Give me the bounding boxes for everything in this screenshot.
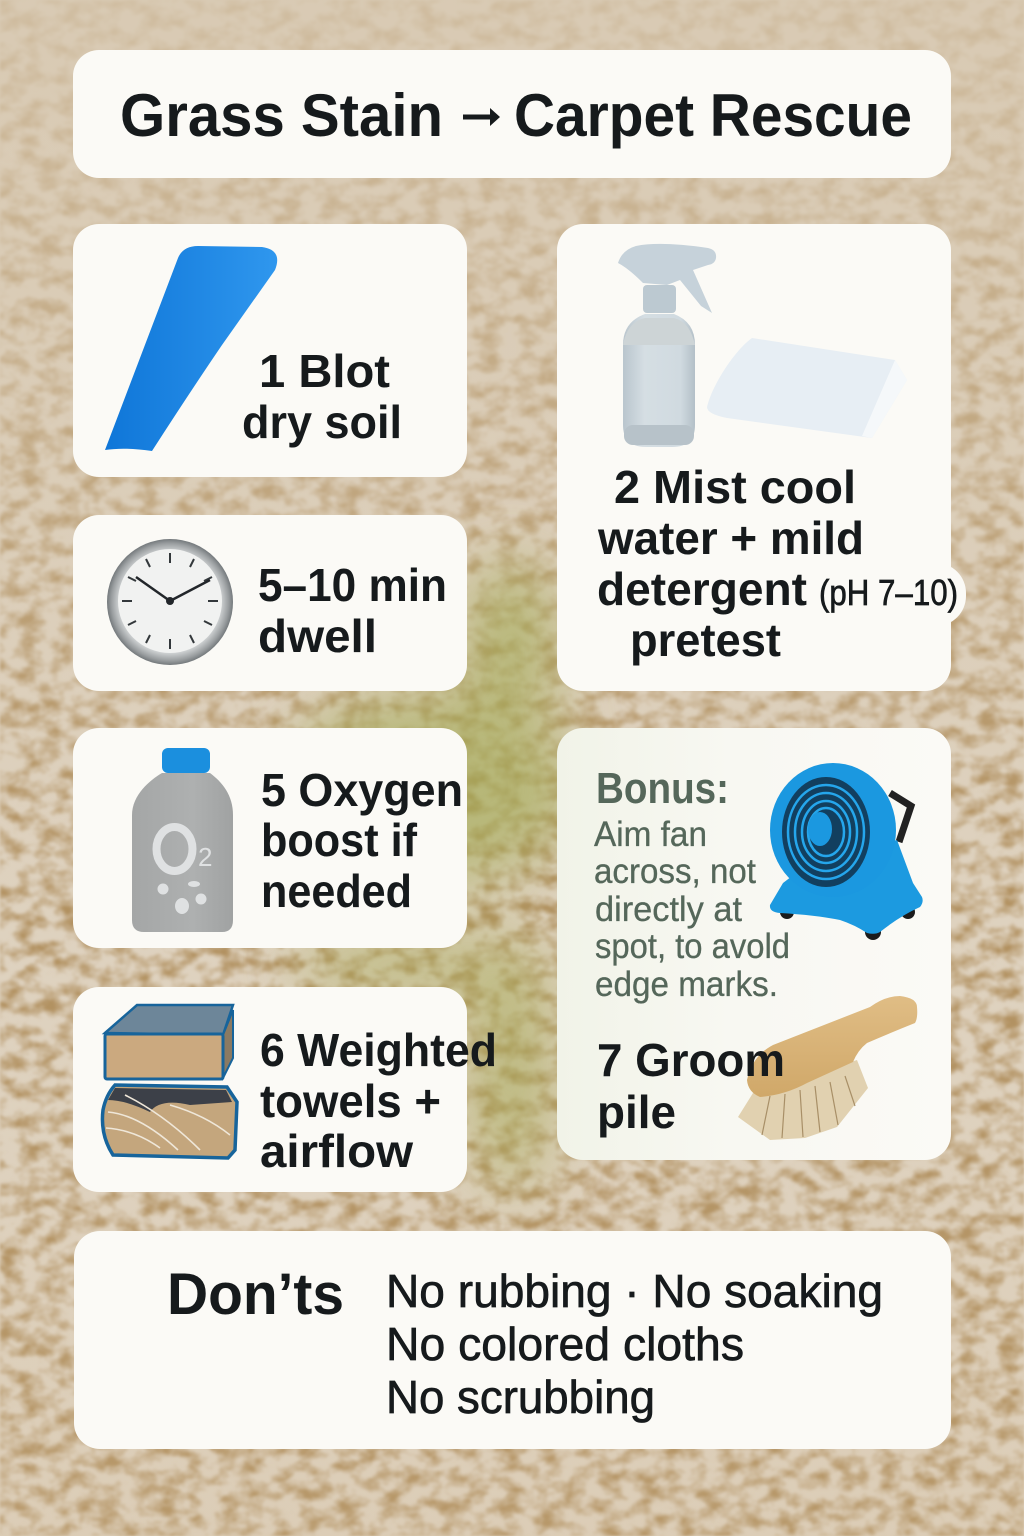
text: step 2: water + mild — [597, 512, 864, 564]
panel: step 1 blot — [73, 224, 467, 477]
text: don'ts list: No rubbing · No soaking — [386, 1265, 883, 1317]
panel: don'ts — [74, 1231, 951, 1449]
icon: oxygen bottle: 2 — [198, 842, 212, 872]
text: step 2: pretest — [630, 614, 781, 666]
text: step 2: detergent — [597, 563, 807, 615]
heading: don'ts: Don’ts — [167, 1262, 344, 1327]
icon: folded towel — [707, 338, 907, 438]
text: step 6 — [260, 1024, 497, 1177]
icon: clock — [107, 539, 233, 665]
text: step 2 — [597, 461, 958, 666]
icon: stacked books — [102, 1005, 237, 1158]
icon: blue blotting cloth — [105, 246, 277, 451]
text: step 7: 7 Groom — [597, 1034, 785, 1086]
text: step 6: towels + — [260, 1075, 441, 1127]
text: bonus — [594, 764, 790, 1004]
arrow — [463, 108, 500, 126]
text: step 7: pile — [597, 1086, 676, 1138]
text: don'ts list — [386, 1265, 883, 1423]
icon: blue fan — [770, 763, 923, 940]
text: step 1 — [242, 345, 402, 448]
text: step 5: needed — [261, 865, 412, 917]
text: step 1: 1 Blot — [259, 345, 390, 397]
panel: step 2 mist — [557, 224, 966, 691]
text: step 6: 6 Weighted — [260, 1024, 497, 1076]
panel: step 5 oxygen — [73, 728, 467, 948]
text: step 1: dry soil — [242, 396, 402, 448]
text: step 7 — [597, 1034, 785, 1138]
text: dwell — [258, 559, 447, 662]
heading: title: Carpet Rescue — [514, 82, 912, 149]
icon: oxygen bottle — [132, 748, 233, 932]
text: bonus: directly at — [595, 890, 742, 929]
text: dwell: dwell — [258, 610, 377, 662]
panel: dwell time — [73, 515, 467, 691]
text: bonus: Bonus: — [596, 764, 729, 813]
panel: bonus and groom — [557, 728, 951, 1160]
text: step 2: (pH 7–10) — [819, 572, 958, 613]
text: step 5 — [261, 764, 463, 917]
text: step 5: boost if — [261, 814, 418, 866]
text: step 5: 5 Oxygen — [261, 764, 463, 816]
text: bonus: Aim fan — [594, 815, 707, 854]
panel: step 6 weighted — [73, 987, 497, 1192]
text: bonus: edge marks. — [595, 965, 778, 1004]
text: step 2: 2 Mist cool — [614, 461, 856, 513]
pH pill bump — [900, 563, 966, 626]
icon: wooden brush — [738, 996, 917, 1140]
panel: title — [73, 50, 951, 178]
text: dwell: 5–10 min — [258, 559, 447, 611]
text: don'ts list: No colored cloths — [386, 1318, 744, 1370]
text: don'ts list: No scrubbing — [386, 1371, 655, 1423]
text: step 6: airflow — [260, 1125, 413, 1177]
text: bonus: spot, to avold — [595, 927, 790, 966]
heading: title: Grass Stain — [120, 82, 443, 149]
icon: spray bottle — [618, 244, 716, 447]
text: bonus: across, not — [594, 852, 756, 891]
